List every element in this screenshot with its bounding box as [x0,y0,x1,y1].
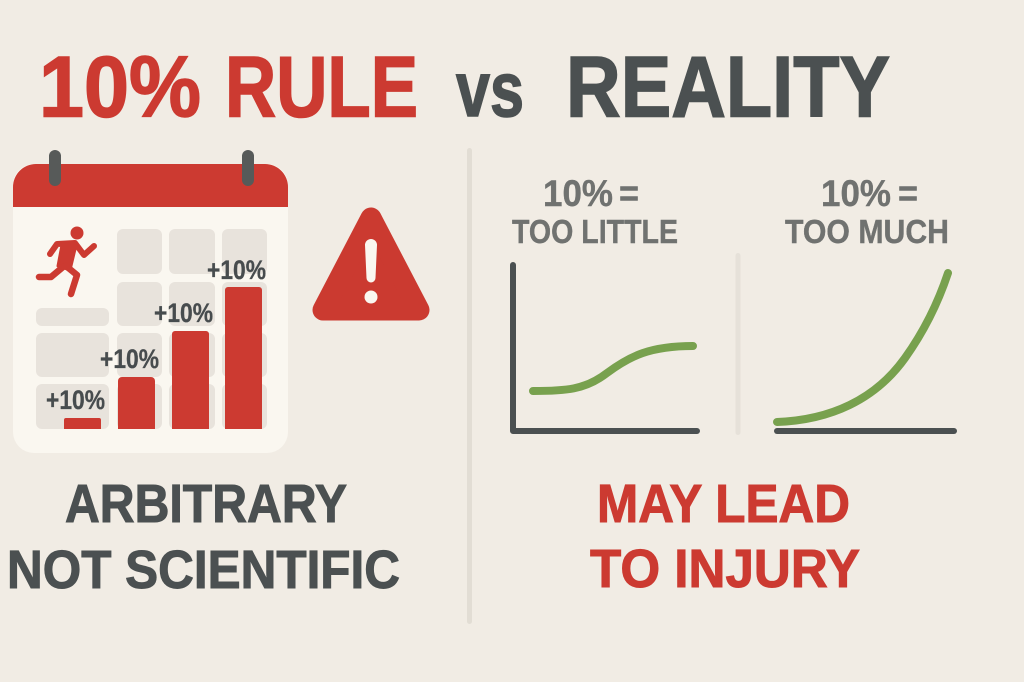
chart: too much [777,273,954,431]
panel: calendar [13,150,288,453]
left caption: ARBITRARY [65,474,347,534]
right caption [590,474,860,599]
icon: warning triangle [323,218,419,310]
title [39,40,890,136]
bar labels: +10% [207,255,266,285]
bar labels: +10% [100,344,159,374]
icon: runner [39,226,94,294]
chart heading: too little [512,173,678,250]
title: REALITY [566,40,890,136]
chart heading: too much: TOO MUCH [785,213,949,250]
chart heading: too little: 10% [543,173,613,214]
left caption: NOT SCIENTIFIC [7,540,400,600]
bar labels: +10% [154,298,213,328]
bar chart [64,287,262,429]
center divider [467,148,472,624]
bar labels: +10% [46,385,105,415]
chart: too little [513,265,697,431]
left caption [7,474,400,600]
title: vs [456,45,524,133]
chart heading: too much: 10% [821,173,891,214]
right caption: MAY LEAD [597,474,850,534]
title: RULE [225,40,418,136]
calendar rings [49,150,254,186]
chart heading: too much [785,173,949,250]
right divider [736,253,740,435]
chart heading: too much: = [898,173,918,214]
right caption: TO INJURY [590,539,860,599]
bar labels [46,255,266,415]
curve: steep growth [777,273,948,422]
title: 10% [39,40,201,136]
calendar grid cells [36,229,267,429]
curve: slow growth [533,346,693,391]
chart heading: too little: TOO LITTLE [512,213,678,250]
chart heading: too little: = [619,173,639,214]
calendar header [13,164,288,207]
